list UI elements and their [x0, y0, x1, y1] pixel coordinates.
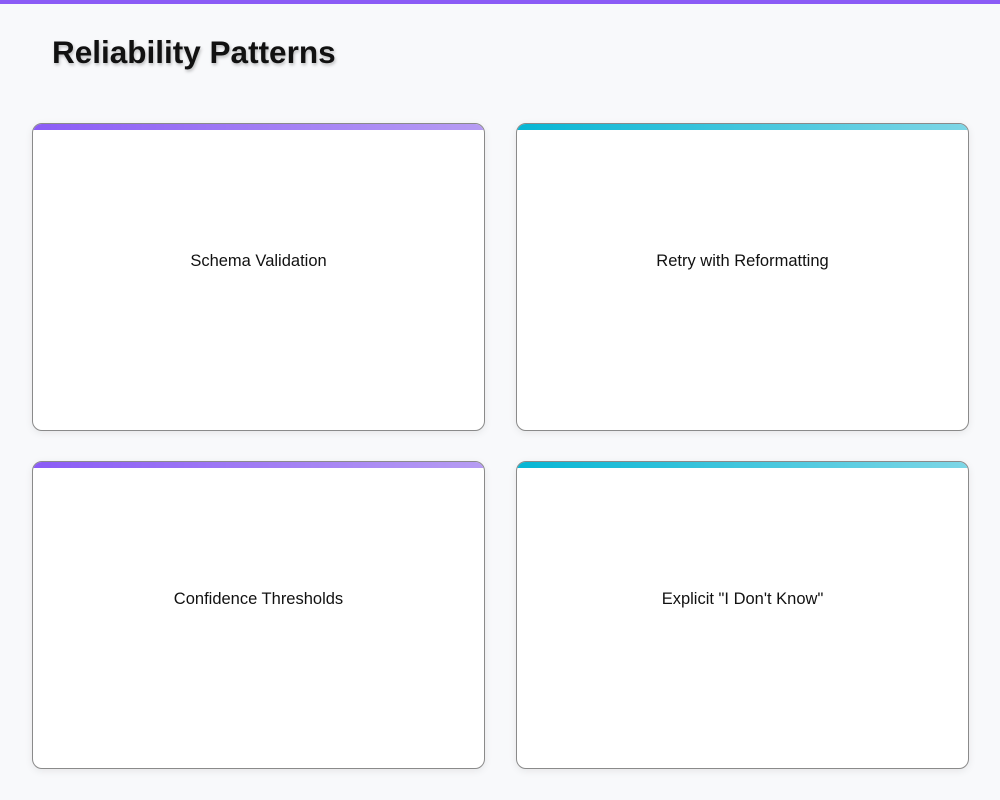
panel: explicit I don't know	[516, 461, 969, 769]
text: schema validation: Schema Validation	[190, 252, 327, 270]
panel: retry with reformatting	[516, 123, 969, 431]
panel: confidence thresholds	[32, 461, 485, 769]
panel: schema validation	[32, 123, 485, 431]
text: explicit: Explicit "I Don't Know"	[662, 590, 823, 608]
text: retry: Retry with Reformatting	[656, 252, 829, 270]
text: confidence: Confidence Thresholds	[174, 590, 343, 608]
title: Reliability Patterns	[52, 34, 336, 70]
